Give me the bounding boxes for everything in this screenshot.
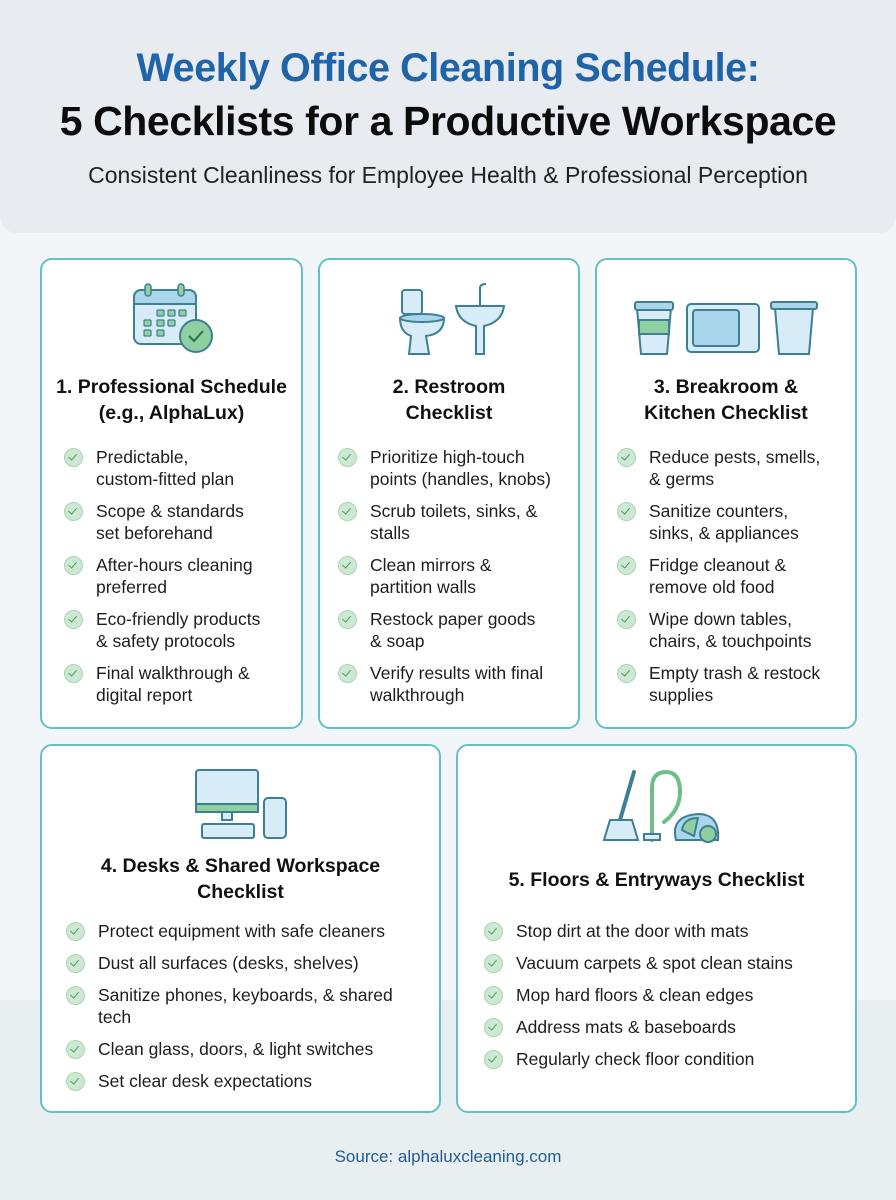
title line 2: 5 Checklists for a Productive Workspace bbox=[60, 98, 836, 144]
checklist: remove old food bbox=[649, 577, 774, 597]
checklist: sinks, & appliances bbox=[649, 523, 799, 543]
icon: computer and phone bbox=[195, 769, 287, 839]
heading: Checklist bbox=[197, 881, 284, 903]
panel: breakroom bbox=[595, 258, 857, 729]
checklist bbox=[64, 447, 260, 705]
panel: restroom bbox=[318, 258, 580, 729]
checklist: Regularly check floor condition bbox=[516, 1049, 754, 1069]
checklist: Clean glass, doors, & light switches bbox=[98, 1039, 373, 1059]
checklist: set beforehand bbox=[96, 523, 213, 543]
checklist: Final walkthrough & bbox=[96, 663, 250, 683]
checklist: walkthrough bbox=[370, 685, 464, 705]
panel: desks bbox=[40, 744, 441, 1113]
subtitle: Consistent Cleanliness for Employee Health & Professional Perception bbox=[88, 162, 808, 188]
checklist bbox=[484, 921, 793, 1069]
checklist: & germs bbox=[649, 469, 714, 489]
panel: floors bbox=[456, 744, 857, 1113]
heading bbox=[56, 376, 287, 424]
checklist: supplies bbox=[649, 685, 713, 705]
checklist: Vacuum carpets & spot clean stains bbox=[516, 953, 793, 973]
checklist: Set clear desk expectations bbox=[98, 1071, 312, 1091]
heading bbox=[101, 855, 380, 903]
checklist: Predictable, bbox=[96, 447, 188, 467]
checklist: Mop hard floors & clean edges bbox=[516, 985, 753, 1005]
checklist: & soap bbox=[370, 631, 424, 651]
checklist: Restock paper goods bbox=[370, 609, 535, 629]
icon: calendar bbox=[133, 283, 213, 353]
checklist: digital report bbox=[96, 685, 192, 705]
header bbox=[0, 0, 896, 233]
title line 1: Weekly Office Cleaning Schedule: bbox=[136, 46, 760, 90]
checklist: Sanitize phones, keyboards, & shared bbox=[98, 985, 393, 1005]
heading: Kitchen Checklist bbox=[644, 402, 808, 424]
checklist bbox=[338, 447, 551, 705]
heading: 4. Desks & Shared Workspace bbox=[101, 855, 380, 877]
icon: toilet and sink bbox=[399, 283, 506, 355]
heading: (e.g., AlphaLux) bbox=[99, 402, 244, 424]
checklist: stalls bbox=[370, 523, 410, 543]
checklist bbox=[617, 447, 820, 705]
heading: 1. Professional Schedule bbox=[56, 376, 287, 398]
heading: Checklist bbox=[406, 402, 492, 424]
panel: professional schedule bbox=[40, 258, 303, 729]
checklist: preferred bbox=[96, 577, 167, 597]
checklist: Empty trash & restock bbox=[649, 663, 820, 683]
checklist: & safety protocols bbox=[96, 631, 235, 651]
checklist: Fridge cleanout & bbox=[649, 555, 786, 575]
checklist: Reduce pests, smells, bbox=[649, 447, 820, 467]
heading: 3. Breakroom & bbox=[654, 376, 798, 398]
icon: mop and vacuum bbox=[602, 770, 720, 843]
checklist: Scope & standards bbox=[96, 501, 244, 521]
checklist: Prioritize high-touch bbox=[370, 447, 525, 467]
heading: 5. Floors & Entryways Checklist bbox=[509, 869, 804, 891]
checklist: chairs, & touchpoints bbox=[649, 631, 811, 651]
checklist: After-hours cleaning bbox=[96, 555, 253, 575]
checklist: Clean mirrors & bbox=[370, 555, 492, 575]
checklist: Eco-friendly products bbox=[96, 609, 260, 629]
checklist: Wipe down tables, bbox=[649, 609, 792, 629]
heading: 2. Restroom bbox=[393, 376, 505, 398]
source: Source: alphaluxcleaning.com bbox=[335, 1147, 561, 1166]
heading bbox=[393, 376, 505, 424]
checklist: partition walls bbox=[370, 577, 476, 597]
checklist: Scrub toilets, sinks, & bbox=[370, 501, 537, 521]
checklist: custom-fitted plan bbox=[96, 469, 234, 489]
heading bbox=[644, 376, 808, 424]
checklist: Verify results with final bbox=[370, 663, 543, 683]
checklist: Sanitize counters, bbox=[649, 501, 788, 521]
icon: cup microwave trash bbox=[634, 301, 818, 355]
checklist bbox=[66, 921, 393, 1091]
checklist: Address mats & baseboards bbox=[516, 1017, 736, 1037]
checklist: Protect equipment with safe cleaners bbox=[98, 921, 385, 941]
checklist: points (handles, knobs) bbox=[370, 469, 551, 489]
checklist: Stop dirt at the door with mats bbox=[516, 921, 748, 941]
checklist: tech bbox=[98, 1007, 131, 1027]
checklist: Dust all surfaces (desks, shelves) bbox=[98, 953, 359, 973]
